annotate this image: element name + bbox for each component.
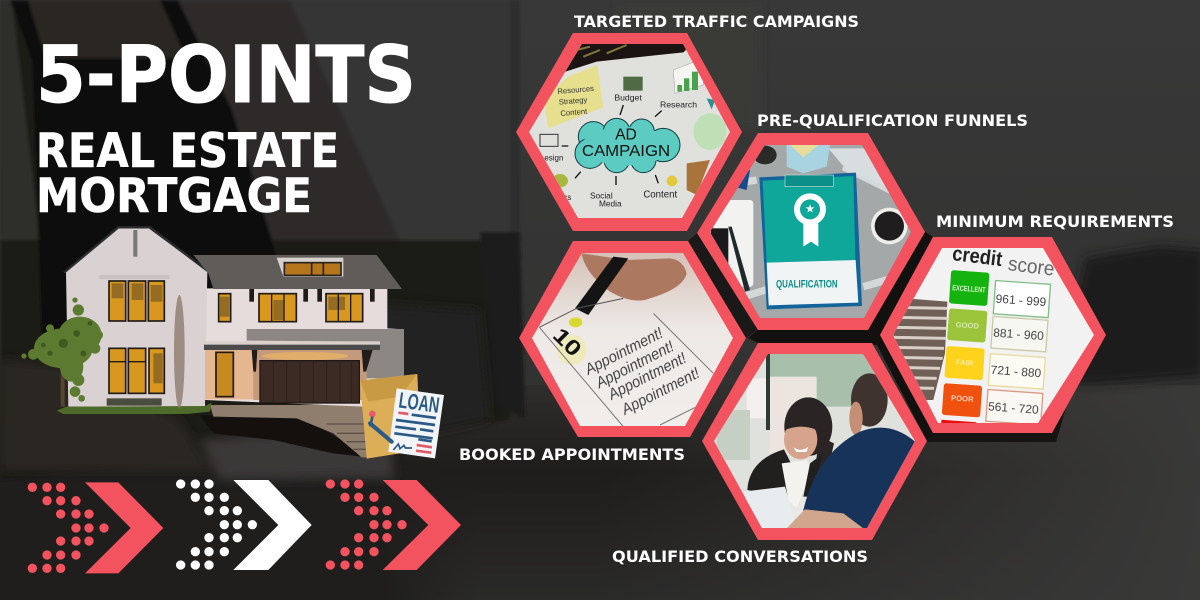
panel: booked appointments: 10 bbox=[548, 323, 586, 361]
panel: minimum requirements: EXCELLENT bbox=[952, 283, 986, 295]
panel: minimum requirements bbox=[880, 237, 1106, 449]
title bbox=[36, 31, 416, 224]
panel: targeted traffic campaigns: Content bbox=[643, 189, 677, 200]
panel: targeted traffic campaigns bbox=[516, 33, 742, 231]
label: pre-qualification funnels: PRE-QUALIFICATION FUNNELS bbox=[757, 111, 1028, 130]
garage door bbox=[260, 361, 359, 403]
panel: pre-qualification funnels: ★ bbox=[805, 204, 815, 216]
house illustration bbox=[21, 227, 444, 459]
label: qualified conversations: QUALIFIED CONVERSATIONS bbox=[612, 547, 868, 566]
arrow: red dots and chevron 1 bbox=[28, 482, 163, 573]
panel: booked appointments: Appointment! bbox=[582, 325, 666, 379]
panel: targeted traffic campaigns: esign bbox=[544, 154, 563, 163]
label: minimum requirements: MINIMUM REQUIREMENTS bbox=[936, 212, 1174, 231]
panel: booked appointments: Appointment! bbox=[618, 365, 703, 419]
panel: targeted traffic campaigns: Resources bbox=[557, 84, 594, 96]
panel: minimum requirements: credit bbox=[951, 242, 1004, 271]
panel: targeted traffic campaigns: Research bbox=[660, 99, 697, 109]
icon: loan document and envelope: LOAN bbox=[397, 388, 441, 418]
heading: real estate: REAL ESTATE bbox=[36, 124, 339, 179]
panel: minimum requirements: GOOD bbox=[955, 320, 980, 331]
shadow between hexagons bbox=[688, 232, 1066, 442]
panel: pre-qualification funnels: QUALIFICATION bbox=[776, 278, 838, 290]
icon: loan document and envelope bbox=[360, 374, 444, 459]
panel: targeted traffic campaigns: Content bbox=[560, 107, 588, 118]
heading: 5-points: 5-POINTS bbox=[36, 31, 416, 121]
panel: minimum requirements: 561 - 720 bbox=[988, 399, 1039, 417]
arrow: white dots and chevron 2 bbox=[176, 479, 312, 570]
panel: targeted traffic campaigns: Strategy bbox=[558, 95, 588, 107]
panel: targeted traffic campaigns: AD bbox=[615, 126, 637, 143]
panel: booked appointments: Appointment! bbox=[605, 350, 690, 404]
label: targeted traffic campaigns: TARGETED TRAFFIC CAMPAIGNS bbox=[574, 12, 859, 31]
panel: minimum requirements: POOR bbox=[951, 393, 974, 404]
panel: minimum requirements: FAIR bbox=[956, 358, 974, 368]
panel: qualified conversations bbox=[702, 343, 927, 540]
panel: booked appointments: Appointment! bbox=[593, 338, 677, 392]
lawn bbox=[57, 403, 212, 414]
panel: minimum requirements: 881 - 960 bbox=[993, 326, 1045, 343]
panel: targeted traffic campaigns: CAMPAIGN bbox=[582, 143, 670, 160]
tree bbox=[21, 297, 103, 407]
panel: targeted traffic campaigns: ics bbox=[562, 193, 571, 202]
panel: targeted traffic campaigns: Media bbox=[599, 199, 622, 209]
arrow: red dots and chevron 3 bbox=[326, 479, 461, 570]
windows bbox=[109, 281, 363, 393]
panel: pre-qualification funnels bbox=[697, 133, 925, 330]
cloud bbox=[575, 118, 680, 173]
label: booked appointments: BOOKED APPOINTMENTS bbox=[459, 445, 685, 464]
panel: minimum requirements: 721 - 880 bbox=[990, 363, 1042, 380]
heading: mortgage: MORTGAGE bbox=[36, 169, 312, 224]
panel: targeted traffic campaigns: Social bbox=[590, 190, 613, 200]
panel: minimum requirements: score bbox=[1007, 253, 1056, 281]
panel: minimum requirements: 961 - 999 bbox=[995, 292, 1047, 309]
panel: booked appointments bbox=[519, 241, 746, 437]
woman bbox=[784, 397, 832, 456]
panel: targeted traffic campaigns: Budget bbox=[614, 93, 642, 103]
man bbox=[851, 373, 888, 427]
